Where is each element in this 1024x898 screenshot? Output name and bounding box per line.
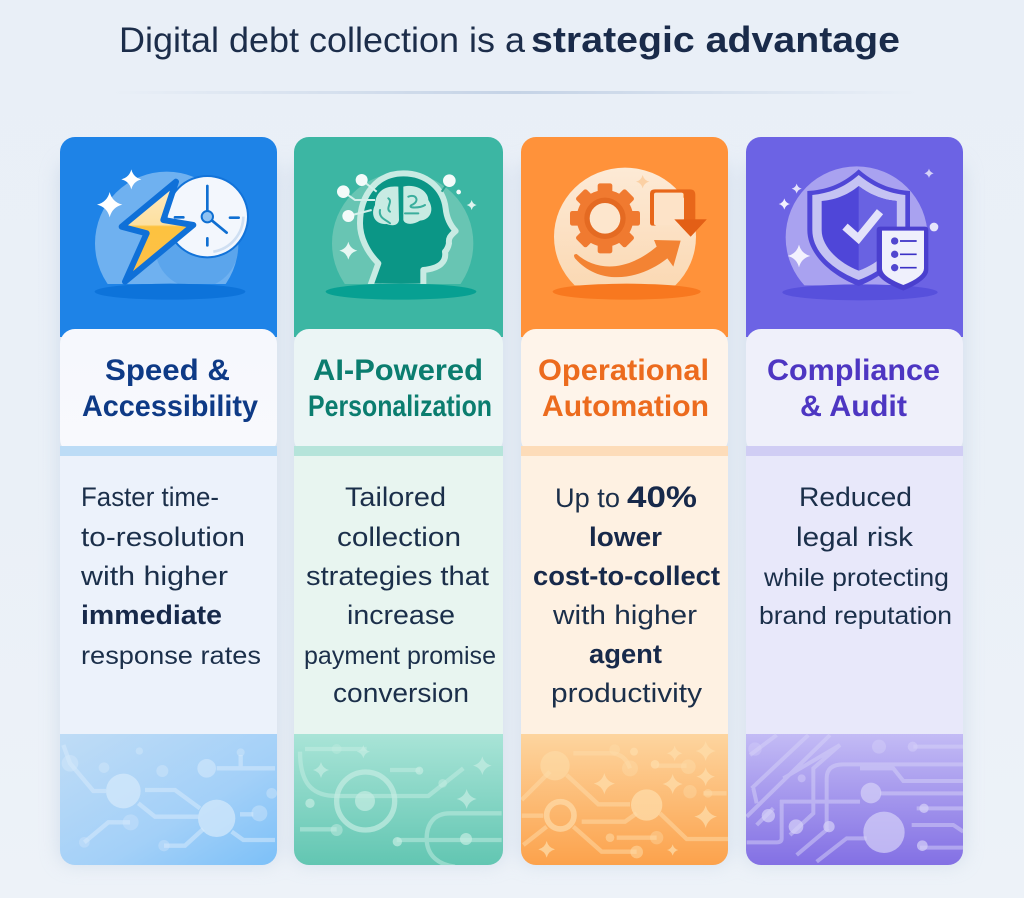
icon: gear and automation arrows: [553, 168, 707, 306]
panel: AI-powered personalization: [294, 137, 503, 867]
heading panel: [60, 329, 277, 454]
body text: [294, 456, 503, 735]
heading panel: [746, 329, 963, 454]
body text: [60, 456, 277, 735]
circuit pattern: [521, 734, 728, 865]
heading panel: AI-Powered: [313, 354, 483, 387]
icon: lightning bolt and clock: [94, 170, 249, 300]
body text: cost-to-collect: [533, 561, 720, 591]
heading panel: Personalization: [308, 390, 492, 423]
body text: legal risk: [796, 522, 914, 552]
body text: brand reputation: [759, 602, 952, 630]
gear: [570, 183, 640, 253]
body text: productivity: [551, 678, 703, 708]
body text: [746, 456, 963, 735]
body text: strategies that: [306, 561, 490, 591]
body text: 40%: [627, 481, 697, 514]
heading panel: [521, 329, 728, 454]
title: strategic advantage: [531, 19, 900, 60]
title: Digital debt collection is a: [119, 21, 526, 60]
body text: lower: [589, 522, 662, 552]
heading panel: Accessibility: [82, 390, 259, 423]
body text: [521, 456, 728, 735]
heading panel: Speed &: [105, 354, 230, 387]
body text: Reduced: [799, 482, 912, 512]
icon: head with brain: [326, 173, 477, 314]
body text: Faster time-: [81, 482, 219, 512]
body text: Tailored: [345, 482, 446, 512]
heading panel: Operational: [538, 354, 709, 387]
body text: payment promise: [304, 642, 496, 670]
body text: increase: [347, 600, 455, 630]
body text: immediate: [81, 600, 222, 630]
body text: with higher: [552, 600, 697, 630]
body text: agent: [589, 639, 662, 669]
icon: shield with checklist: [779, 166, 938, 308]
circuit pattern: [60, 734, 277, 865]
body text: response rates: [81, 642, 261, 670]
panel: operational automation: [521, 137, 728, 865]
heading panel: Compliance: [767, 354, 940, 387]
body text: with higher: [80, 561, 228, 591]
body text: to-resolution: [81, 522, 245, 552]
panel: speed and accessibility: [60, 137, 277, 865]
panel: compliance and audit: [746, 137, 963, 865]
heading panel: [294, 329, 503, 454]
body text: collection: [337, 522, 461, 552]
body text: while protecting: [763, 564, 949, 592]
circuit pattern: [746, 734, 963, 865]
body text: Up to: [555, 483, 620, 513]
heading panel: Automation: [542, 390, 709, 423]
circuit pattern: [294, 734, 503, 867]
body text: conversion: [333, 678, 469, 708]
title: [119, 19, 900, 60]
heading panel: & Audit: [800, 390, 907, 423]
